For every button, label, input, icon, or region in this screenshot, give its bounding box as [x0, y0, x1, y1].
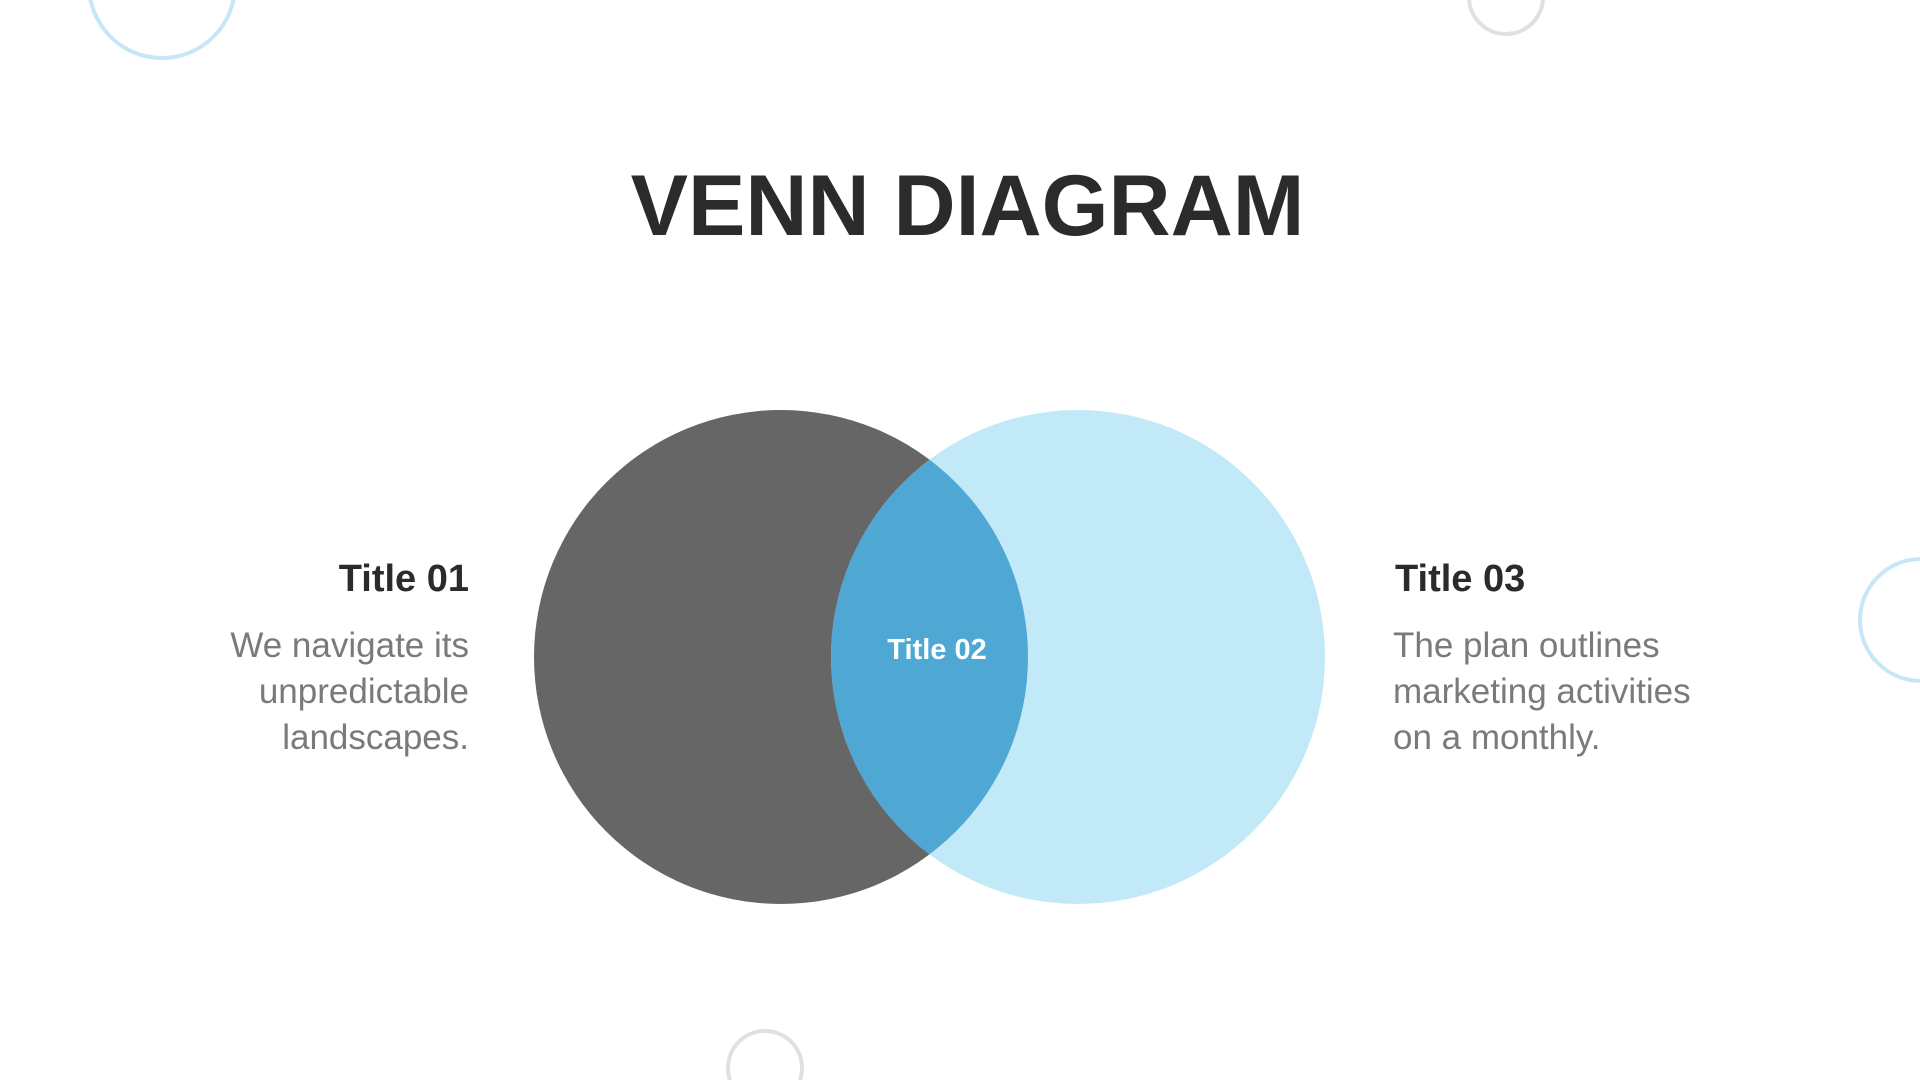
text block: Title 01: landscapes.	[282, 718, 469, 757]
text block: Title 01: unpredictable	[259, 672, 469, 711]
label: Title 02: Title 02	[887, 634, 987, 666]
venn diagram	[534, 410, 1325, 904]
text block: Title 03: The plan outlines	[1393, 626, 1660, 665]
text block: Title 03: on a monthly.	[1393, 718, 1601, 757]
text block: Title 01: Title 01	[339, 558, 469, 600]
text block: Title 03: marketing activities	[1393, 672, 1691, 711]
text block: Title 03: Title 03	[1395, 558, 1525, 600]
intersection	[831, 460, 1028, 854]
text block: Title 01: We navigate its	[230, 626, 469, 665]
circle: left	[534, 410, 1028, 904]
circle: right	[831, 410, 1325, 904]
text block: Title 03	[1393, 558, 1691, 757]
title: VENN DIAGRAM	[631, 158, 1304, 254]
text block: Title 01	[230, 558, 469, 757]
